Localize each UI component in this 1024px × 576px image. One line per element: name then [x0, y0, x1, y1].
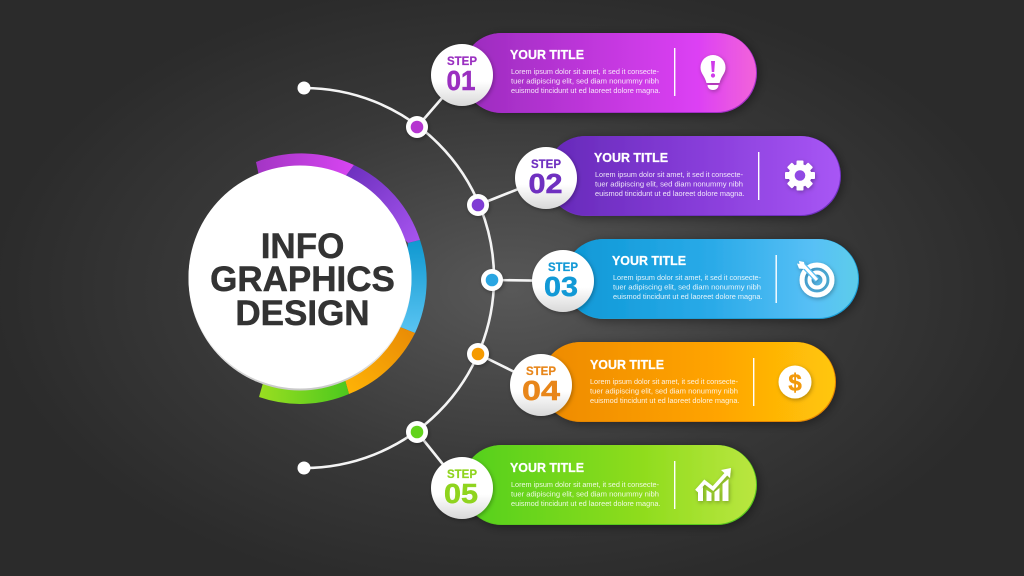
- timeline arc: [298, 82, 494, 474]
- icon: target: [797, 261, 832, 295]
- body text: [613, 275, 763, 301]
- step number: STEP: [447, 467, 477, 481]
- step number: 01: [446, 65, 476, 96]
- badge title: GRAPHICS: [210, 260, 395, 299]
- step number: [522, 364, 561, 406]
- body text: Lorem ipsum dolor sit amet, it sed it consecte-: [613, 275, 762, 282]
- step badge: [431, 457, 493, 519]
- step badge: [515, 147, 577, 209]
- body text: [511, 69, 661, 95]
- body text: euismod tincidunt ut ed laoreet dolore magna.: [595, 191, 745, 198]
- connector lines: [417, 75, 563, 488]
- body text: euismod tincidunt ut ed laoreet dolore magna.: [511, 88, 661, 95]
- body text: [511, 482, 661, 508]
- step number: STEP: [526, 364, 556, 378]
- body text: [595, 172, 745, 198]
- pill: [462, 33, 757, 113]
- node 2: [467, 194, 489, 216]
- step number: 04: [522, 375, 561, 406]
- badge title: DESIGN: [235, 294, 370, 333]
- body text: tuer adipiscing elit, sed diam nonummy nibh: [511, 78, 659, 86]
- body text: tuer adipiscing elit, sed diam nonummy nibh: [595, 182, 743, 188]
- node 3: [481, 269, 503, 291]
- icon: dollar coin: [778, 366, 812, 398]
- step number: [528, 157, 562, 199]
- pill: [564, 239, 859, 319]
- body text: Lorem ipsum dolor sit amet, it sed it consecte-: [511, 69, 660, 76]
- step badge: [532, 250, 594, 312]
- step number: STEP: [447, 54, 477, 68]
- step number: 03: [544, 271, 578, 302]
- panel: step 3: [532, 239, 859, 319]
- pill: [546, 136, 841, 216]
- icon: dollar coin: $: [788, 370, 802, 396]
- arc end dot: [298, 462, 310, 474]
- ring segment blue: [400, 240, 427, 333]
- step number: [444, 467, 478, 509]
- step number: [544, 260, 578, 302]
- arc start dot: [298, 82, 310, 94]
- ring segment orange: [345, 327, 415, 394]
- body text: euismod tincidunt ut ed laoreet dolore magna.: [613, 294, 763, 301]
- icon: light bulb: [700, 55, 726, 90]
- white disc: [188, 166, 412, 390]
- body text: Lorem ipsum dolor sit amet, it sed it consecte-: [595, 172, 744, 179]
- node 4: [467, 343, 489, 365]
- panel: step 4: [510, 342, 836, 422]
- heading: YOUR TITLE: [590, 357, 664, 372]
- panel: step 2: [515, 136, 841, 216]
- step badge: [431, 44, 493, 106]
- panel: step 1: [431, 33, 757, 113]
- node 1: [406, 116, 428, 138]
- body text: tuer adipiscing elit, sed diam nonummy nibh: [613, 284, 761, 292]
- heading: YOUR TITLE: [594, 150, 668, 165]
- node 5: [406, 421, 428, 443]
- step badge: [510, 354, 572, 416]
- badge title: [210, 227, 395, 333]
- heading: YOUR TITLE: [612, 253, 686, 268]
- ring segment violet: [345, 165, 420, 243]
- panel: step 5: [431, 445, 757, 525]
- body text: Lorem ipsum dolor sit amet, it sed it consecte-: [511, 482, 660, 489]
- timeline nodes: [406, 116, 503, 443]
- step number: STEP: [548, 260, 578, 274]
- ring segment green: [259, 380, 349, 404]
- heading: YOUR TITLE: [510, 47, 584, 62]
- step number: 02: [528, 168, 562, 199]
- icon: growth chart: [696, 468, 731, 501]
- body text: [590, 379, 740, 405]
- central badge: [188, 153, 427, 404]
- step number: STEP: [531, 157, 561, 171]
- body text: euismod tincidunt ut ed laoreet dolore magna.: [590, 398, 740, 405]
- step number: 05: [444, 478, 478, 509]
- body text: tuer adipiscing elit, sed diam nonummy nibh: [511, 492, 659, 498]
- ring segment purple: [256, 153, 354, 177]
- badge title: INFO: [261, 227, 344, 266]
- pill: [541, 342, 836, 422]
- body text: Lorem ipsum dolor sit amet, it sed it consecte-: [590, 379, 739, 386]
- pill: [462, 445, 757, 525]
- body text: euismod tincidunt ut ed laoreet dolore magna.: [511, 501, 661, 508]
- heading: YOUR TITLE: [510, 460, 584, 475]
- icon: gear: [785, 160, 815, 190]
- body text: tuer adipiscing elit, sed diam nonummy nibh: [590, 388, 738, 396]
